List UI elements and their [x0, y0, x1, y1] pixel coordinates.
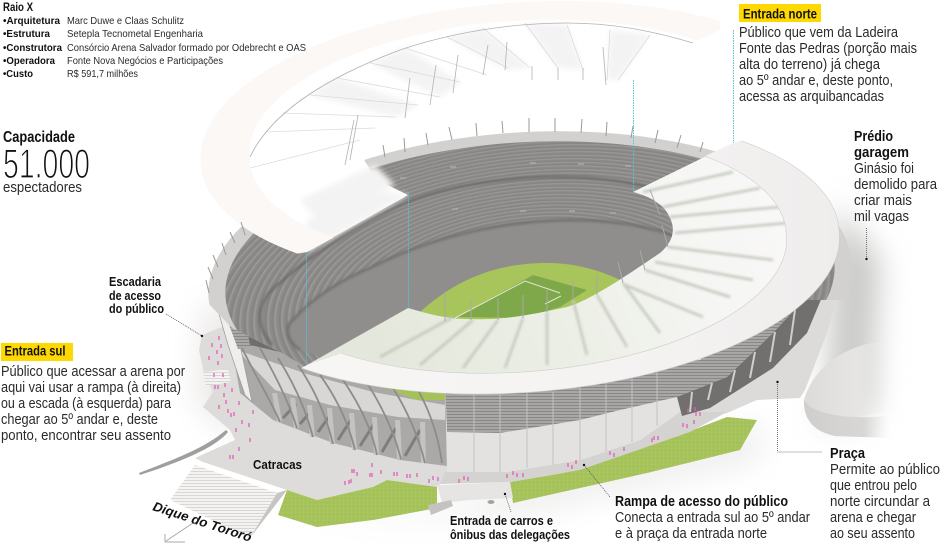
soft shadow around the arena	[195, 205, 880, 520]
green slope left	[278, 480, 437, 527]
callout: Praça: norte circundar a	[830, 493, 931, 510]
callout: Prédio garagem: mil vagas	[854, 208, 909, 225]
stairs to Dique do Tororó	[170, 465, 287, 538]
label: Escadaria de acesso do público: de acesso	[109, 289, 161, 303]
pillars	[272, 393, 426, 463]
aisle marks	[400, 163, 631, 213]
callout: Entrada sul: aqui vai usar a rampa (à direita)	[1, 379, 181, 396]
ground below the ramp and vehicles	[428, 482, 513, 515]
south facade	[445, 235, 832, 472]
capacity figure: 51.000	[3, 140, 90, 187]
callout: Rampa de acesso do público: Conecta a entrada sul ao 5º andar	[615, 509, 810, 526]
lower roof ring	[301, 140, 839, 394]
Raio X data list	[3, 0, 306, 80]
upper stair steps	[203, 369, 231, 386]
Raio X data list: •Estrutura	[3, 28, 50, 40]
window bars	[690, 310, 795, 412]
callout: Praça: que entrou pelo	[830, 477, 917, 494]
callout: Rampa de acesso do público: Rampa de acesso do público	[615, 493, 788, 510]
callout: Prédio garagem: garagem	[854, 144, 909, 161]
pink public figures	[209, 336, 700, 485]
diagonal braces	[283, 404, 420, 456]
label: Catracas: Catracas	[253, 457, 302, 472]
floating upper roof panels	[230, 15, 693, 252]
stair block	[228, 322, 252, 349]
callout: Entrada sul: Entrada sul	[4, 344, 66, 358]
leader lines	[166, 228, 866, 512]
rim masts	[206, 118, 703, 293]
callout: Entrada norte	[739, 4, 917, 105]
Raio X data list: •Arquitetura	[3, 15, 60, 27]
panel ribs	[380, 172, 787, 368]
callout: Entrada norte: Público que vem da Ladeira	[739, 24, 899, 41]
upper panel ribs	[250, 23, 650, 168]
callout: Prédio garagem: Ginásio foi	[854, 160, 914, 177]
south plaza	[139, 300, 460, 500]
translucent panel shading	[300, 23, 650, 252]
callout: Praça: ao seu assento	[830, 525, 915, 542]
capacity figure: espectadores	[3, 179, 82, 196]
Raio X data list: •Custo	[3, 68, 33, 80]
callout: Entrada norte: ao 5º andar e, deste ponto,	[739, 72, 893, 89]
north plaza and garage base	[670, 250, 890, 438]
label: Entrada de carros e ônibus	[450, 513, 570, 542]
callout: Rampa de acesso do público	[615, 493, 810, 542]
capacity figure	[3, 129, 90, 196]
concourse with columns	[215, 298, 447, 466]
Raio X data list: R$ 591,7 milhões	[67, 68, 138, 80]
callout: Entrada sul	[1, 343, 185, 444]
callout: Praça	[830, 445, 940, 542]
label: Escadaria de acesso do público: do público	[109, 302, 164, 316]
blue dotted connector lines	[306, 30, 734, 365]
callout: Entrada norte: Entrada norte	[743, 6, 817, 22]
label: Escadaria de acesso do público: Escadaria	[109, 275, 162, 289]
lower roof panels	[307, 143, 800, 385]
Raio X data list: Consórcio Arena Salvador formado por Odebrecht e OAS	[67, 42, 306, 54]
callout: Praça: arena e chegar	[830, 509, 916, 526]
green ramp slope right	[510, 417, 757, 503]
leader dots	[201, 258, 868, 495]
label: Entrada de carros e ônibus: ônibus das delegações	[450, 527, 570, 542]
callout: Rampa de acesso do público: e à praça da entrada norte	[615, 525, 767, 542]
callout: Entrada norte: acessa as arquibancadas	[739, 88, 884, 105]
capacity figure: Capacidade	[3, 129, 75, 146]
callout: Entrada sul: ponto, encontrar seu assento	[1, 427, 171, 444]
Raio X data list: Setepla Tecnometal Engenharia	[67, 28, 203, 40]
Raio X data list: •Construtora	[3, 42, 62, 54]
arrow to Dique do Tororó	[165, 523, 193, 542]
callout: Entrada sul: Público que acessar a arena por	[1, 363, 185, 380]
callout: Prédio garagem: criar mais	[854, 192, 912, 209]
callout: Entrada sul: ou a escada (à esquerda) para	[1, 395, 172, 412]
callout: Entrada sul: chegar ao 5º andar e, deste	[1, 411, 158, 428]
label: Entrada de carros e ônibus: Entrada de carros e	[450, 513, 553, 528]
access ramp band	[440, 412, 727, 484]
Raio X data list: •Operadora	[3, 55, 55, 67]
Raio X data list: Marc Duwe e Claas Schulitz	[67, 15, 184, 27]
facade mullions	[474, 365, 657, 472]
callout: Prédio garagem	[854, 128, 938, 225]
football pitch	[420, 263, 620, 320]
stadium bowl stands	[208, 131, 848, 366]
floating upper roof ring	[200, 1, 720, 254]
callout: Prédio garagem: Prédio	[854, 128, 893, 145]
roof masts	[445, 190, 668, 321]
label: Escadaria de acesso do público	[109, 275, 164, 316]
Raio X data list: Raio X	[3, 0, 33, 14]
Raio X data list: Fonte Nova Negócios e Participações	[67, 55, 223, 67]
callout: Entrada norte: alta do terreno) já chega	[739, 56, 881, 73]
upper panel masts	[345, 42, 606, 165]
curved stays	[242, 348, 442, 463]
label: Dique do Tororó: Dique do Tororó	[151, 499, 254, 544]
callout: Praça: Praça	[830, 445, 866, 462]
